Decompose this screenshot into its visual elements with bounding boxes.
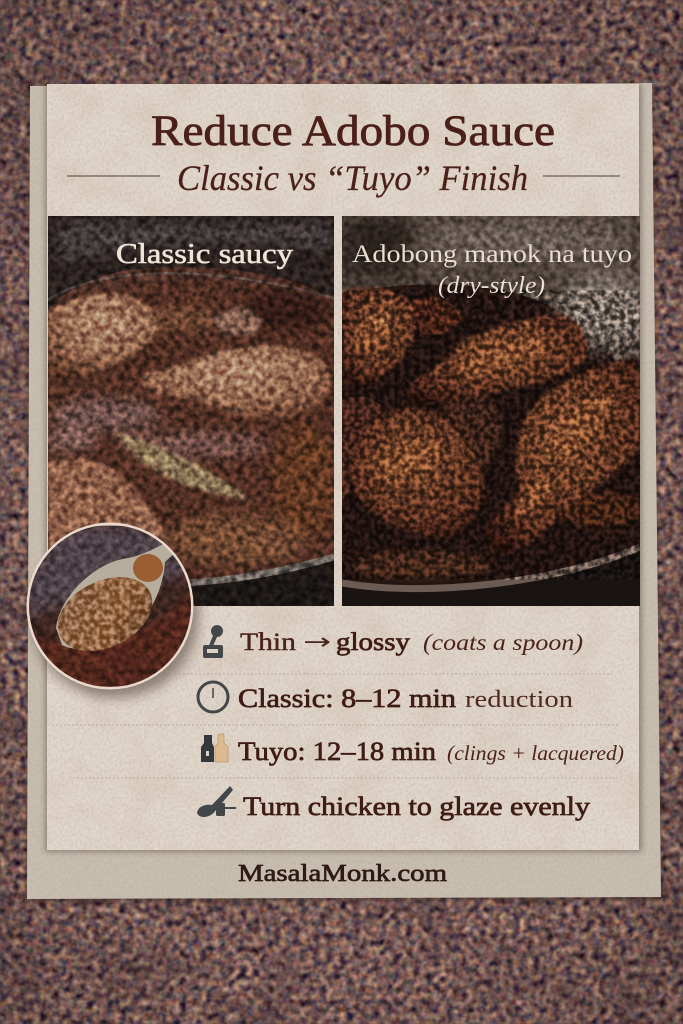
icon: tongs bbox=[197, 786, 236, 817]
thigh bbox=[48, 293, 159, 376]
chicken: upper drumstick bbox=[407, 314, 588, 405]
row 1: thin to glossy: Thin bbox=[240, 629, 297, 656]
row dividers bbox=[52, 674, 618, 778]
panel: classic saucy photo bbox=[46, 216, 335, 606]
row 1: thin to glossy: (coats a spoon) bbox=[423, 630, 583, 655]
row 3: tuyo time: (clings + lacquered) bbox=[447, 741, 624, 765]
row 4: turn chicken: Turn chicken to glaze evenly bbox=[243, 792, 590, 821]
row 2: classic time: reduction bbox=[465, 687, 573, 713]
pan base and rim bbox=[342, 548, 640, 606]
row 2: classic time: Classic: 8–12 min bbox=[238, 684, 456, 713]
bay leaf bbox=[115, 431, 250, 500]
lower chicken bbox=[48, 459, 167, 560]
browned pieces bbox=[212, 305, 262, 335]
chicken: lower left thigh bbox=[350, 409, 484, 538]
inset: spoon of sauce bbox=[26, 522, 199, 698]
row 4: turn chicken bbox=[197, 786, 590, 821]
back paper sheet bbox=[27, 83, 661, 902]
wall texture bbox=[342, 216, 640, 326]
pan rim and base bbox=[191, 560, 334, 606]
icon: spoon in sauce bbox=[203, 625, 223, 658]
pan upper wall bbox=[48, 216, 334, 310]
footer: website: MasalaMonk.com bbox=[238, 861, 447, 887]
lacquer highlights bbox=[347, 304, 623, 522]
row 3: tuyo time bbox=[201, 734, 624, 766]
chicken: lower right drumstick bbox=[485, 358, 640, 555]
bottom pan fond bbox=[350, 551, 490, 579]
spoon bbox=[56, 544, 173, 649]
label: classic saucy: Classic saucy bbox=[116, 239, 293, 270]
label: tuyo title: (dry-style) bbox=[438, 273, 545, 299]
row 1: thin to glossy bbox=[203, 625, 583, 658]
front paper card bbox=[45, 84, 642, 852]
icon: bottles bbox=[201, 734, 228, 762]
icon: clock bbox=[198, 682, 228, 712]
row 2: classic time bbox=[198, 682, 573, 713]
chicken: upper left bbox=[342, 288, 417, 386]
title: Reduce Adobo Sauce bbox=[151, 108, 555, 155]
row 3: tuyo time: Tuyo: 12–18 min bbox=[238, 737, 436, 766]
surface texture bbox=[48, 216, 334, 606]
panel: tuyo dry-style photo bbox=[342, 216, 650, 606]
label: tuyo title bbox=[352, 241, 632, 299]
glaze texture bbox=[342, 290, 640, 580]
pan wall bbox=[342, 216, 640, 400]
row 1: thin to glossy: → bbox=[303, 630, 331, 655]
sauce bbox=[48, 282, 334, 585]
label: tuyo title: Adobong manok na tuyo bbox=[352, 241, 632, 268]
row 1: thin to glossy: glossy bbox=[336, 629, 411, 656]
drumstick bbox=[143, 346, 330, 419]
subtitle with rules: Classic vs “Tuyo” Finish bbox=[177, 158, 528, 198]
